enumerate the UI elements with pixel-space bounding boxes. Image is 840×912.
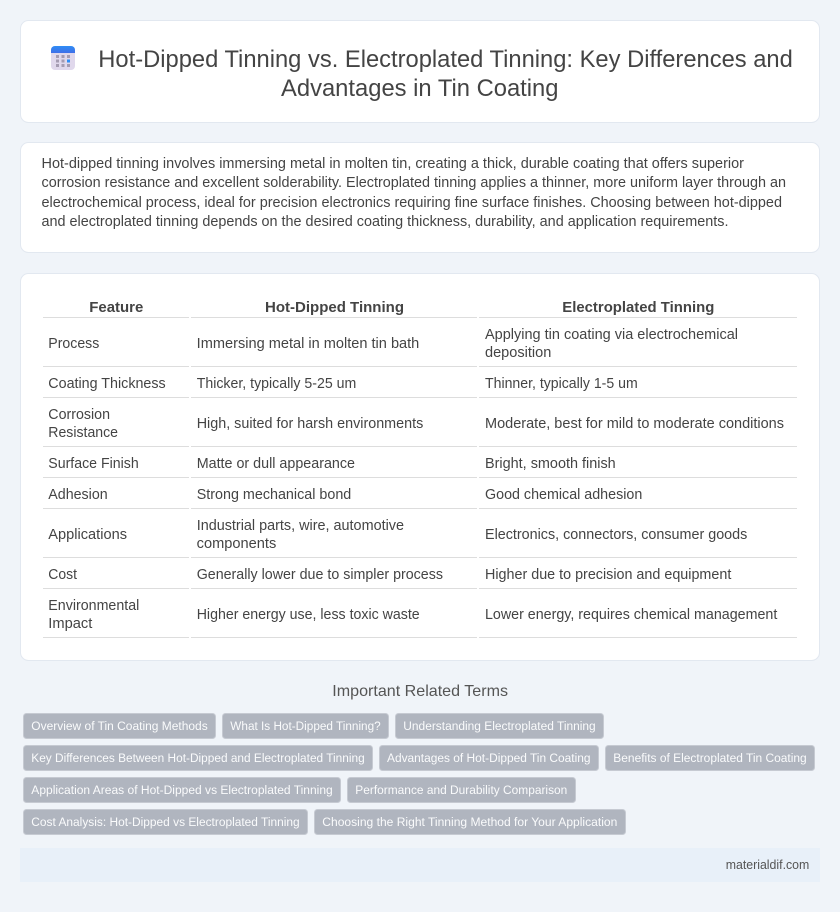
tag: Choosing the Right Tinning Method for Your Application	[322, 815, 617, 829]
tag: Key Differences Between Hot-Dipped and Electroplated Tinning	[31, 751, 365, 765]
text block: introduction paragraph: Hot-dipped tinning involves immersing metal in molten tin, creating a thick, durable coating that offers superior	[42, 156, 744, 172]
row: coating thickness: Thinner, typically 1-5 um	[485, 376, 638, 392]
row: corrosion resistance	[48, 407, 784, 441]
tag	[380, 746, 598, 770]
row: corrosion resistance: High, suited for harsh environments	[197, 416, 423, 432]
row: process: Immersing metal in molten tin bath	[197, 336, 419, 352]
row: environmental impact: Impact	[48, 616, 92, 632]
row: cost: Cost	[48, 567, 77, 583]
tag: Overview of Tin Coating Methods	[31, 719, 208, 733]
panel: title card	[20, 20, 820, 122]
table header: Hot-Dipped Tinning	[265, 299, 404, 316]
row: coating thickness: Thicker, typically 5-25 um	[197, 376, 356, 392]
row: process: Applying tin coating via electrochemical	[485, 327, 738, 343]
row: adhesion: Good chemical adhesion	[485, 487, 642, 503]
row: corrosion resistance: Corrosion	[48, 407, 110, 423]
row: cost: Higher due to precision and equipment	[485, 567, 731, 583]
row: process: deposition	[485, 345, 551, 361]
row: surface finish: Matte or dull appearance	[197, 456, 355, 472]
row: coating thickness	[48, 376, 638, 392]
row: coating thickness: Coating Thickness	[48, 376, 166, 392]
tag: What Is Hot-Dipped Tinning?	[230, 719, 381, 733]
tag	[606, 746, 814, 770]
row: surface finish: Bright, smooth finish	[485, 456, 616, 472]
tag: Advantages of Hot-Dipped Tin Coating	[387, 751, 591, 765]
row: adhesion: Adhesion	[48, 487, 108, 503]
footer bar	[20, 848, 820, 882]
text block: introduction paragraph: electrochemical process, ideal for precision electronics requiring fine surface finishes. Choosing between hot-dipped	[42, 195, 782, 211]
title: Advantages in Tin Coating	[281, 75, 558, 102]
text block: introduction paragraph	[42, 156, 786, 230]
row: process: Process	[48, 336, 99, 352]
title	[98, 46, 793, 102]
row: surface finish	[48, 456, 616, 472]
row: surface finish: Surface Finish	[48, 456, 139, 472]
table header: Electroplated Tinning	[562, 299, 714, 316]
panel: related term tags	[24, 714, 814, 834]
row: adhesion: Strong mechanical bond	[197, 487, 351, 503]
row: applications: Electronics, connectors, consumer goods	[485, 527, 747, 543]
tag: Understanding Electroplated Tinning	[403, 719, 596, 733]
tag: Cost Analysis: Hot-Dipped vs Electroplated Tinning	[31, 815, 300, 829]
tag: Performance and Durability Comparison	[355, 783, 567, 797]
row: corrosion resistance: Resistance	[48, 425, 118, 441]
row: applications: Industrial parts, wire, automotive	[197, 518, 404, 534]
row: applications	[48, 518, 747, 552]
tag: Application Areas of Hot-Dipped vs Electroplated Tinning	[31, 783, 333, 797]
tag: Benefits of Electroplated Tin Coating	[613, 751, 807, 765]
row: cost: Generally lower due to simpler process	[197, 567, 443, 583]
tag	[314, 810, 626, 834]
tag	[396, 714, 604, 738]
row: cost	[48, 567, 731, 583]
row: adhesion	[48, 487, 642, 503]
panel: comparison table	[20, 274, 820, 660]
text block: introduction paragraph: and electroplated tinning depends on the desired coating thickness, durability, and application requirements.	[42, 214, 728, 230]
tag	[24, 810, 308, 834]
tag	[222, 714, 388, 738]
row: environmental impact	[48, 598, 777, 632]
title: Hot-Dipped Tinning vs. Electroplated Tinning: Key Differences and	[98, 46, 793, 73]
tag	[24, 746, 372, 770]
row: process	[48, 327, 738, 361]
panel: introduction	[20, 142, 820, 252]
table header: Feature	[89, 299, 143, 316]
row: applications: components	[197, 536, 276, 552]
text block: introduction paragraph: corrosion resistance and excellent solderability. Electroplated tinning applies a thinner, more uniform layer through an	[42, 175, 786, 191]
row: corrosion resistance: Moderate, best for mild to moderate conditions	[485, 416, 784, 432]
row: applications: Applications	[48, 527, 127, 543]
heading: important related terms: Important Related Terms	[332, 683, 508, 700]
table header	[89, 299, 714, 316]
tag	[348, 778, 576, 802]
row: environmental impact: Higher energy use, less toxic waste	[197, 607, 420, 623]
row: environmental impact: Environmental	[48, 598, 139, 614]
icon: calendar	[51, 46, 75, 70]
tag	[24, 778, 340, 802]
row: environmental impact: Lower energy, requires chemical management	[485, 607, 777, 623]
tag	[24, 714, 216, 738]
footer source text: materialdif.com	[726, 857, 809, 872]
